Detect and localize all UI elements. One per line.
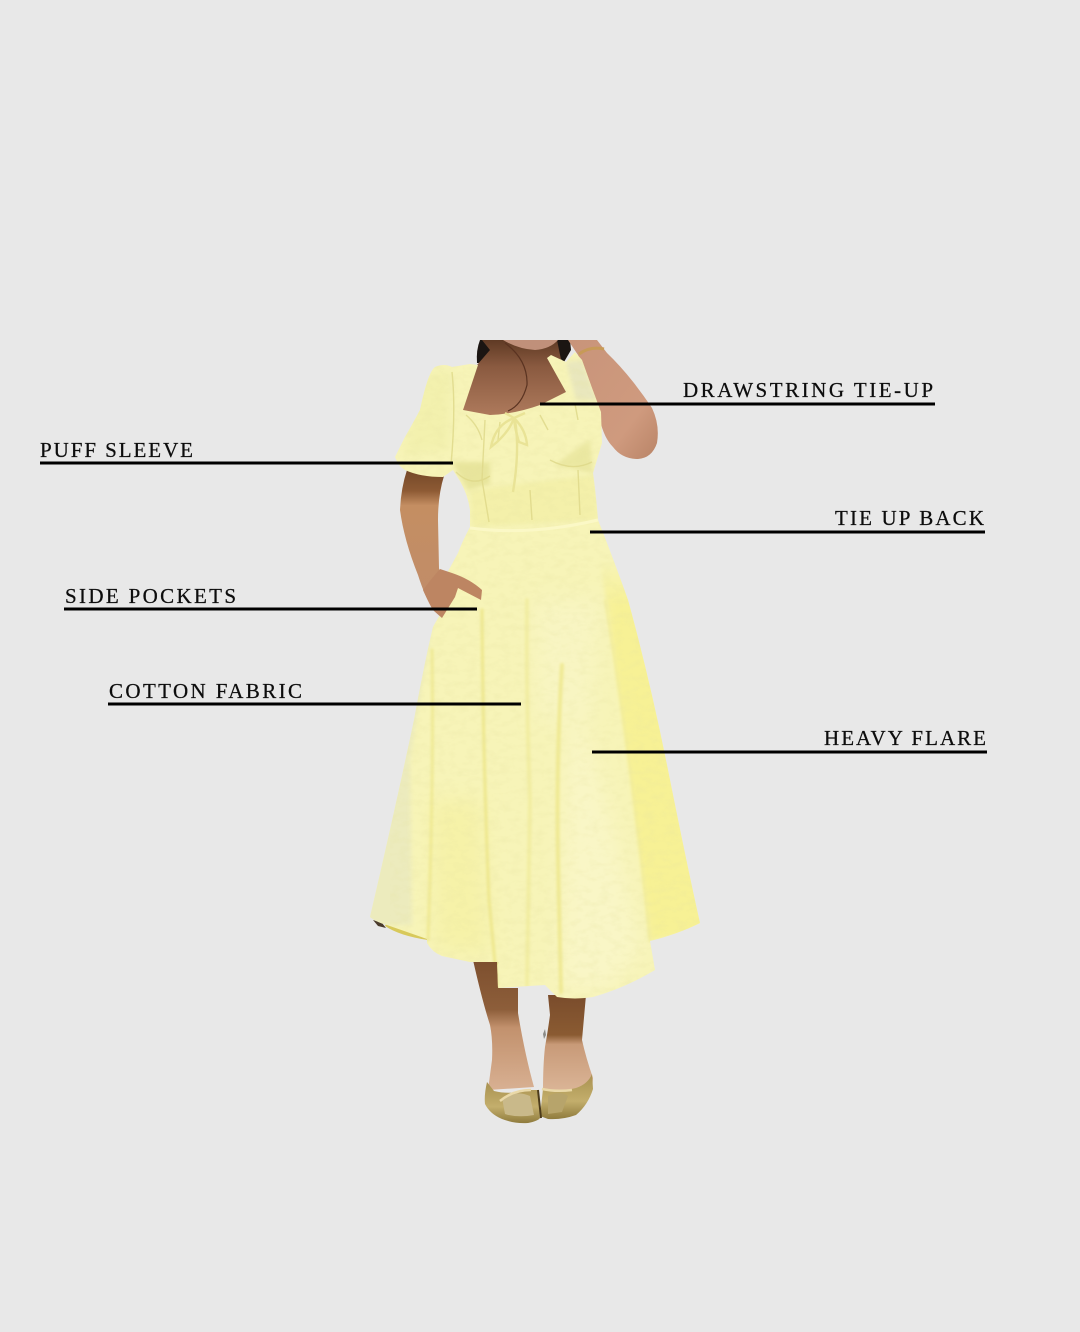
label: tie up back	[590, 506, 985, 534]
figure: model wearing yellow dress	[365, 340, 710, 1123]
drawstring bow	[491, 413, 527, 492]
necklace cord	[505, 343, 527, 411]
bodice shading	[408, 374, 448, 449]
label: puff sleeve: PUFF SLEEVE	[40, 438, 193, 462]
bright central panels	[564, 736, 634, 998]
gold ballet flats	[485, 1074, 593, 1123]
label: side pockets: SIDE POCKETS	[65, 584, 236, 608]
lowered arm	[400, 470, 446, 618]
waist seam	[470, 520, 598, 531]
inner hem of skirt	[385, 922, 428, 940]
hem shadow	[373, 920, 386, 928]
label: heavy flare	[592, 726, 987, 754]
stray mark beside ankle	[543, 1029, 546, 1039]
infographic canvas	[40, 340, 987, 1124]
fabric texture	[590, 827, 607, 978]
label: heavy flare: HEAVY FLARE	[824, 726, 986, 750]
label: drawstring tie-up	[540, 378, 935, 406]
left grey-pale panel	[370, 714, 416, 926]
label: drawstring tie-up: DRAWSTRING TIE-UP	[683, 378, 933, 402]
legs	[473, 960, 534, 1090]
dress	[370, 352, 700, 998]
label: cotton fabric: COTTON FABRIC	[109, 679, 302, 703]
label: puff sleeve	[40, 438, 453, 464]
raised arm and hand	[568, 340, 658, 459]
chin	[503, 340, 558, 350]
label: tie up back: TIE UP BACK	[835, 506, 984, 530]
dress folds and shading	[365, 350, 710, 1010]
hair	[477, 340, 571, 363]
fabric seam and gather lines	[451, 372, 592, 988]
bracelet	[579, 348, 604, 354]
neck and chest skin	[462, 340, 568, 416]
label: side pockets	[64, 584, 477, 610]
vertical skirt folds	[428, 600, 650, 992]
right flare panel	[603, 571, 700, 941]
label: cotton fabric	[108, 679, 521, 706]
hand in pocket	[423, 569, 482, 618]
